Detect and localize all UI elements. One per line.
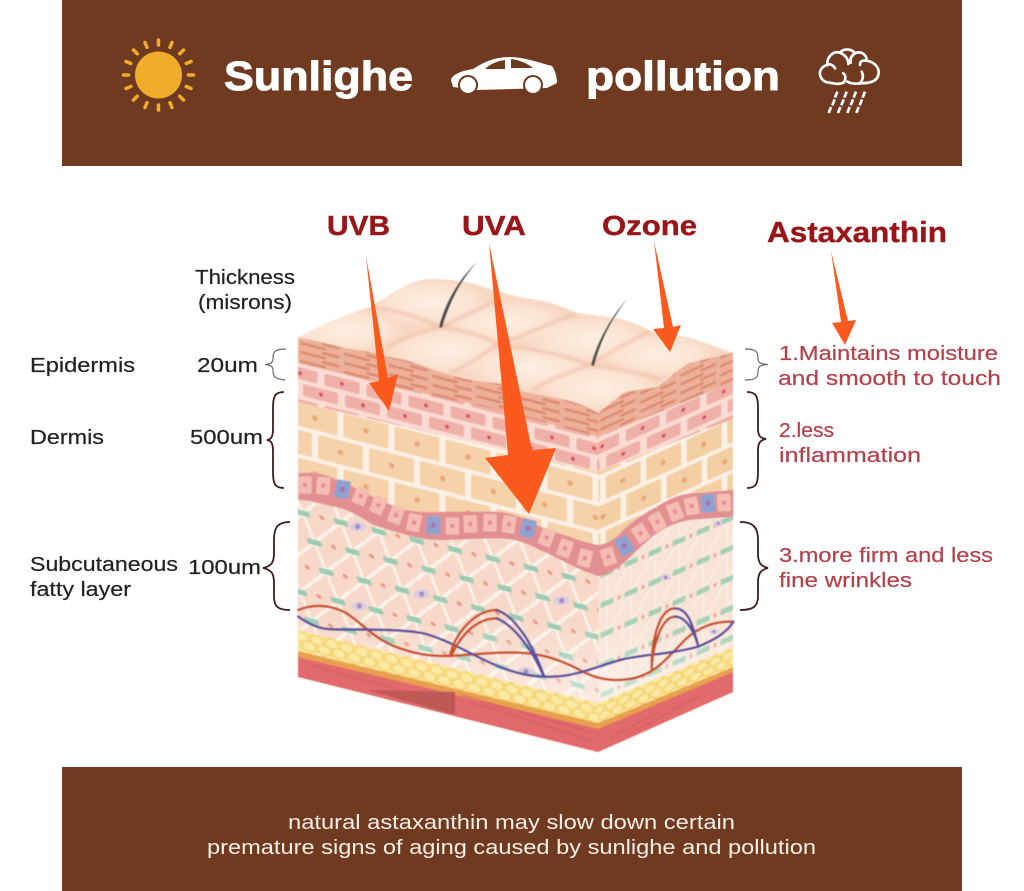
pink brick layer [298, 362, 734, 472]
layer labels: fatty layer [30, 578, 131, 601]
thickness column heading: (misrons) [198, 291, 292, 314]
hair strands [439, 262, 628, 366]
blood vessels [298, 606, 733, 680]
benefits list [778, 342, 1001, 592]
layer labels: 500um [190, 426, 263, 449]
thickness column heading: Thickness [195, 266, 295, 289]
arrow: UVB [366, 256, 398, 411]
stratum corneum band [298, 336, 734, 438]
peach brick layer [297, 402, 734, 546]
benefits list: 3.more firm and less [779, 544, 993, 567]
purple cells [350, 521, 723, 676]
layer labels: Epidermis [30, 354, 135, 377]
layer labels: 100um [188, 556, 261, 579]
icon: rain cloud [820, 49, 879, 113]
benefits list: fine wrinkles [779, 569, 912, 592]
thickness column heading [195, 266, 295, 314]
heading: Sunlighe: Sunlighe [224, 53, 413, 99]
muscle layer [298, 651, 733, 752]
benefits list: and smooth to touch [778, 367, 1001, 390]
skin cross-section block [289, 262, 735, 752]
cell membrane strip [298, 473, 733, 576]
benefits list: inflammation [779, 444, 921, 467]
arrow: Astaxanthin [831, 251, 856, 345]
label: UVB: UVB [327, 210, 390, 241]
layer labels [30, 354, 263, 601]
layer labels: Dermis [30, 426, 104, 449]
skin surface [289, 275, 735, 417]
heading: pollution: pollution [586, 53, 780, 99]
layer labels: 20um [197, 354, 258, 377]
layer labels: Subcutaneous [30, 553, 178, 576]
yellow fat layer [297, 630, 734, 724]
label: UVA: UVA [462, 210, 526, 241]
top banner [62, 0, 962, 166]
arrow: Ozone [653, 241, 681, 352]
benefits list: 1.Maintains moisture [779, 342, 998, 365]
caption: premature signs of aging caused by sunlighe and pollution [207, 837, 816, 859]
icon: car [451, 57, 557, 95]
left braces [263, 349, 290, 610]
icon: sun [124, 40, 194, 110]
arrow: UVA [485, 243, 556, 514]
label: Ozone: Ozone [602, 210, 697, 241]
bottom banner [62, 767, 962, 891]
label: Astaxanthin: Astaxanthin [767, 217, 947, 249]
benefits list: 2.less [779, 419, 834, 442]
caption: natural astaxanthin may slow down certain [288, 812, 735, 834]
right braces [740, 349, 768, 610]
subcutaneous cell layer [298, 473, 733, 752]
caption [207, 812, 816, 859]
